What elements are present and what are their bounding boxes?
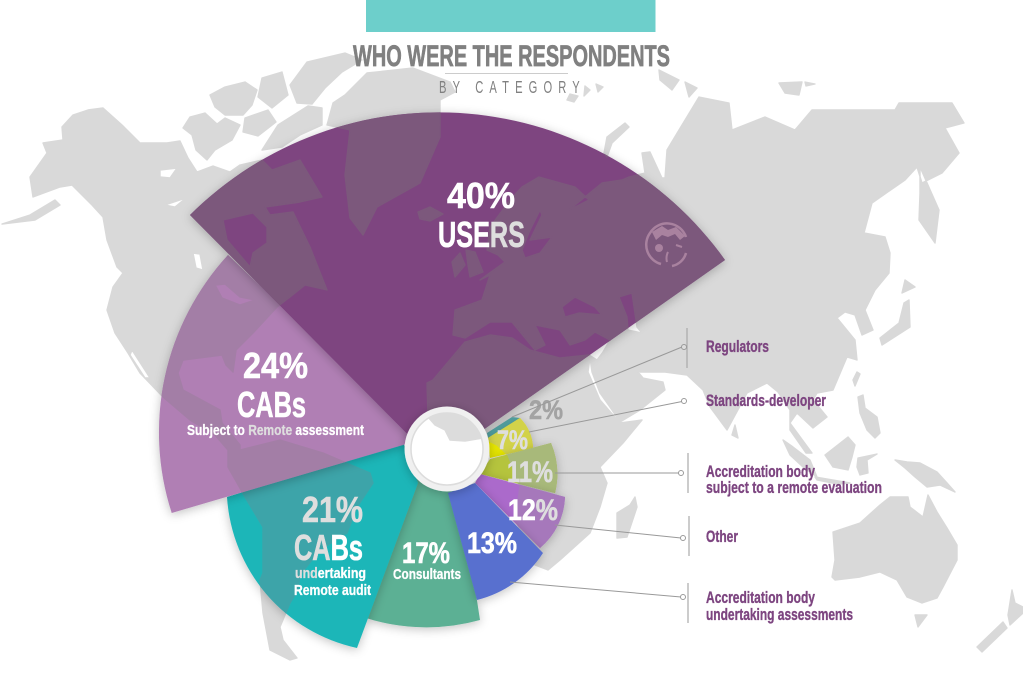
label: 40% users: 40% (447, 175, 515, 216)
label: 21% CABs: Remote audit (294, 582, 371, 599)
sector: users 40% (188, 109, 727, 440)
legend text: accreditation body remote evaluation (706, 462, 882, 497)
label: 24% CABs (187, 345, 364, 439)
sector: other 12% (473, 474, 569, 552)
centre circle (400, 406, 494, 498)
legend leader: accreditation body remote evaluation (555, 453, 688, 493)
label: 21% CABs (294, 489, 371, 599)
label: 11%: 11% (507, 456, 553, 489)
label: 12%: 12% (508, 494, 558, 527)
legend text: accreditation body assessments: undertaking assessments (706, 605, 853, 624)
sector: standards-developer 7% (488, 418, 537, 460)
legend text: accreditation body assessments: Accreditation body (706, 588, 815, 607)
label: 24% CABs: Subject to Remote assessment (187, 422, 364, 439)
label: 21% CABs: 21% (302, 489, 363, 530)
sector: accreditation body assessments 13% (448, 483, 543, 600)
title: BY CATEGORY (439, 77, 580, 98)
title (353, 40, 670, 98)
legend text: other: Other (706, 527, 738, 546)
label: 17% consultants: 17% (402, 537, 450, 570)
legend text: accreditation body assessments (706, 588, 853, 624)
legend text: standards-developer: Standards-developer (706, 391, 826, 410)
legend leader: standards-developer (529, 398, 686, 432)
label: 2%: 2% (529, 395, 563, 425)
legend leader: other (555, 516, 689, 556)
sector: regulators 2% (487, 417, 520, 438)
label: 40% users: USERS (438, 214, 525, 255)
label: 24% CABs: 24% (243, 345, 308, 386)
legend text: accreditation body remote evaluation: subject to a remote evaluation (706, 478, 882, 497)
legend leader: accreditation body assessments (510, 582, 688, 623)
title: WHO WERE THE RESPONDENTS (353, 40, 670, 73)
label: 13%: 13% (467, 527, 517, 560)
sector: CABs remote assessment 24% (154, 255, 408, 518)
legend text: accreditation body remote evaluation: Accreditation body (706, 462, 815, 481)
label: 17% consultants (393, 537, 461, 583)
label: 21% CABs: undertaking (295, 565, 366, 582)
label: 21% CABs: CABs (294, 527, 363, 568)
label: 17% consultants: Consultants (393, 566, 461, 583)
label: 40% users (438, 175, 525, 255)
sector: consultants 17% (366, 470, 480, 627)
icon: globe (646, 223, 686, 266)
label: 7%: 7% (497, 425, 528, 455)
legend leader: regulators (512, 328, 687, 417)
top teal banner (366, 0, 656, 32)
label: 24% CABs: CABs (237, 384, 306, 425)
legend text: regulators: Regulators (706, 337, 769, 356)
sector: accreditation body remote evaluation 11% (481, 442, 562, 495)
sector: CABs remote audit 21% (222, 444, 420, 654)
pie chart (154, 109, 727, 654)
